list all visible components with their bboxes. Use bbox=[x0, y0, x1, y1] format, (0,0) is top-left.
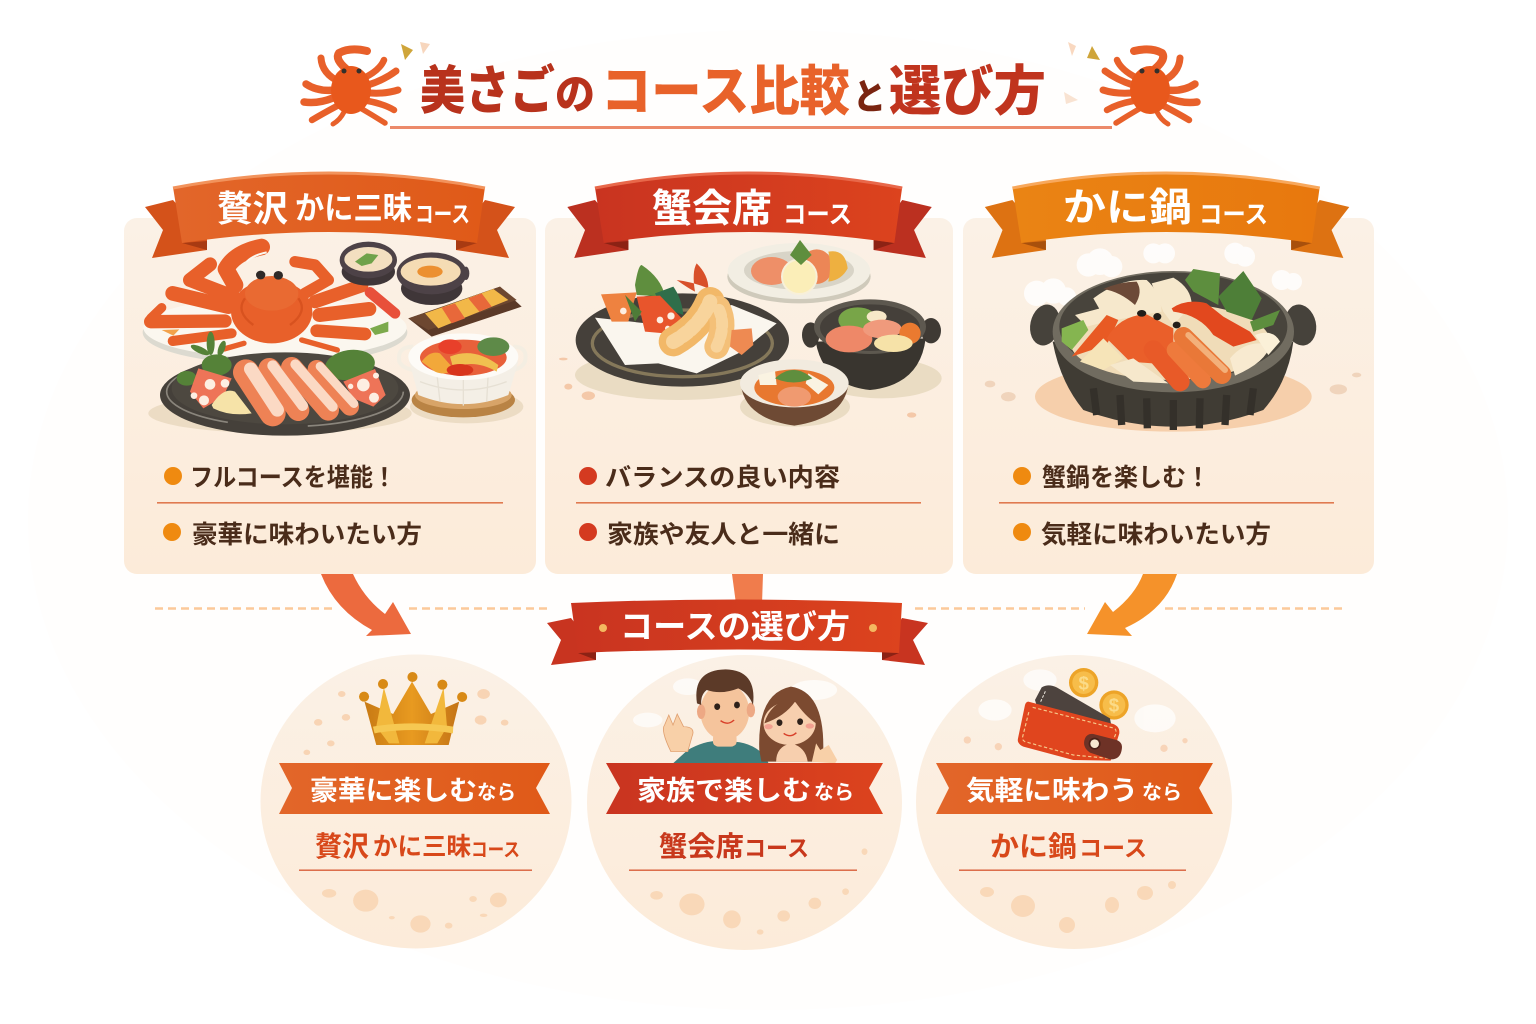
title text bbox=[420, 62, 1046, 122]
icon: crown bbox=[303, 672, 508, 755]
course name: かに三昧 bbox=[373, 833, 471, 861]
circle background bbox=[260, 654, 572, 948]
card background bbox=[963, 218, 1374, 574]
course name bbox=[959, 831, 1186, 871]
list items bbox=[999, 464, 1334, 549]
icon: left crab bbox=[304, 49, 398, 124]
illustration: crab platter and side dishes bbox=[143, 242, 526, 436]
ribbon label bbox=[279, 763, 550, 814]
arrow: left course to circle bbox=[321, 574, 411, 636]
list items bbox=[576, 464, 921, 549]
decorative blobs bbox=[980, 881, 1176, 933]
ribbon heading bbox=[145, 172, 515, 258]
panel: 蟹会席コース bbox=[545, 172, 953, 574]
list items: 豪華に味わいたい方 bbox=[192, 521, 422, 549]
circle background bbox=[587, 655, 902, 950]
title text: 選び方 bbox=[889, 62, 1046, 122]
course name: 贅沢 bbox=[315, 831, 369, 862]
course name: コース bbox=[1079, 835, 1147, 861]
ribbon heading: コース bbox=[1199, 201, 1268, 229]
panel: 贅沢かに三昧コース bbox=[124, 172, 536, 574]
ribbon heading: コース bbox=[783, 201, 852, 229]
circle: 気軽に味わうなら bbox=[916, 655, 1232, 949]
ribbon label: なら bbox=[477, 781, 516, 804]
icon: family bbox=[633, 669, 837, 763]
ribbon heading bbox=[985, 172, 1349, 258]
title text: の bbox=[555, 71, 595, 118]
panel: かに鍋コース bbox=[963, 172, 1374, 574]
list items: 蟹鍋を楽しむ！ bbox=[1042, 464, 1210, 492]
ribbon heading: 贅沢 bbox=[217, 188, 288, 229]
circle background bbox=[916, 655, 1232, 949]
circle: 家族で楽しむなら bbox=[587, 655, 902, 950]
list items: 気軽に味わいたい方 bbox=[1041, 521, 1271, 549]
circle: 豪華に楽しむなら bbox=[260, 654, 572, 948]
ribbon label bbox=[606, 763, 883, 814]
list items: バランスの良い内容 bbox=[605, 464, 840, 492]
illustration: crab hot pot bbox=[985, 243, 1361, 432]
ribbon heading: コース bbox=[415, 201, 470, 227]
icon: wallet and coins bbox=[964, 668, 1188, 761]
title text: 美さご bbox=[420, 62, 555, 121]
course name: かに鍋 bbox=[990, 831, 1077, 862]
title text: コース比較 bbox=[601, 62, 850, 122]
title underline bbox=[390, 126, 1112, 129]
ribbon heading: かに鍋 bbox=[1063, 187, 1192, 230]
illustration: tempura and side dishes bbox=[559, 240, 942, 427]
ribbon label: なら bbox=[1142, 781, 1182, 804]
list items bbox=[157, 464, 503, 549]
arrow: right course to circle bbox=[1087, 574, 1177, 636]
ribbon heading: コースの選び方: コースの選び方 bbox=[620, 608, 850, 645]
decorative blobs bbox=[650, 848, 867, 935]
ribbon label: なら bbox=[814, 781, 854, 804]
decorative blobs bbox=[322, 889, 507, 933]
ribbon label: 家族で楽しむ bbox=[637, 776, 811, 806]
icon: wallet and coins: $ bbox=[1078, 672, 1089, 693]
course name bbox=[629, 831, 857, 871]
sparkles bbox=[401, 42, 1100, 104]
card background bbox=[545, 218, 953, 574]
ribbon heading: コースの選び方 bbox=[547, 600, 928, 665]
ribbon label: 豪華に楽しむ bbox=[310, 776, 477, 806]
ribbon heading: 蟹会席 bbox=[652, 188, 772, 231]
course name: 蟹会席 bbox=[659, 831, 744, 862]
ribbon heading: かに三昧 bbox=[295, 190, 412, 226]
list items: 家族や友人と一緒に bbox=[607, 521, 840, 549]
course name: コース bbox=[471, 840, 520, 861]
ribbon heading bbox=[567, 172, 932, 258]
course name bbox=[299, 831, 532, 871]
icon: right crab bbox=[1103, 49, 1197, 124]
card background bbox=[124, 218, 536, 574]
ribbon label bbox=[936, 763, 1213, 814]
list items: フルコースを堪能！ bbox=[190, 464, 396, 492]
title text: と bbox=[853, 76, 886, 117]
arrow: center course to heading bbox=[732, 574, 763, 604]
title bbox=[304, 42, 1197, 129]
icon: wallet and coins: $ bbox=[1109, 695, 1120, 716]
ribbon label: 気軽に味わう bbox=[966, 776, 1138, 806]
course name: コース bbox=[744, 835, 809, 861]
